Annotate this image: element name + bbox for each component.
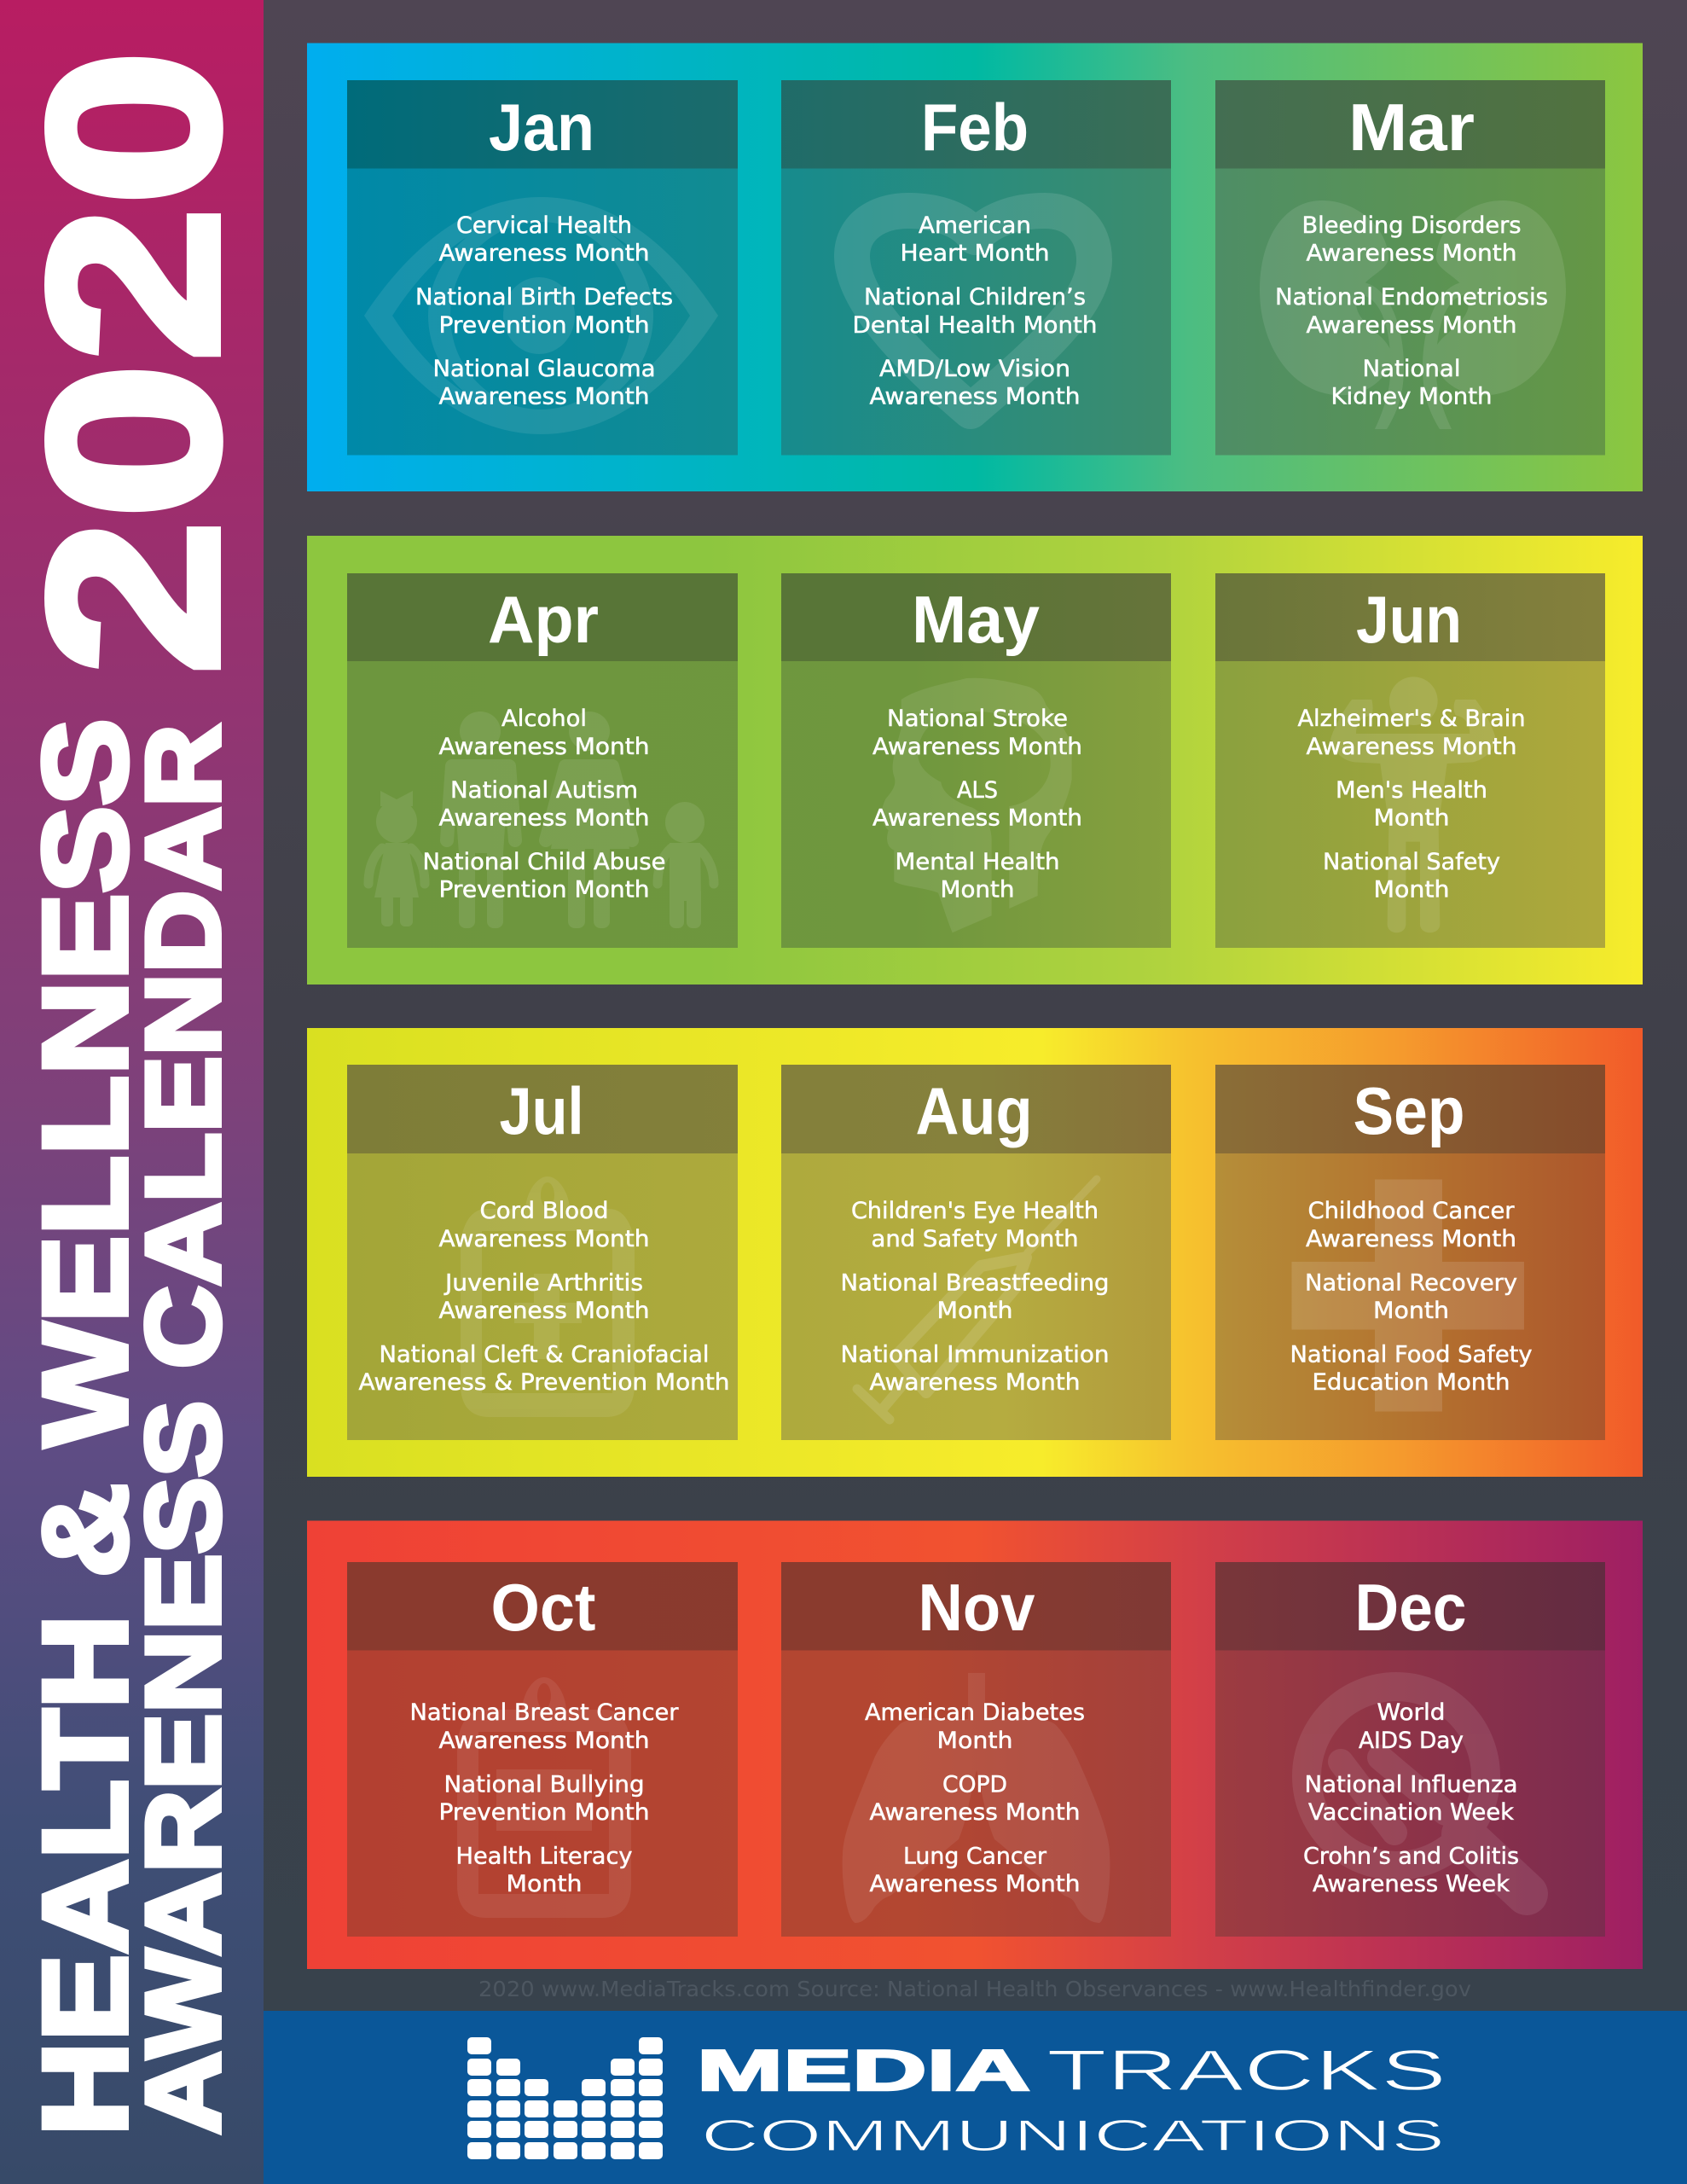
panel: June <box>1215 573 1605 948</box>
text block: March observances: Awareness Month <box>1307 241 1516 266</box>
text block: September observances: National Recovery <box>1305 1269 1517 1296</box>
text block: July observances <box>358 1198 730 1396</box>
heading: Sep: Sep <box>1353 1073 1465 1148</box>
logo wordmark: TRACKS: TRACKS <box>1046 2038 1446 2103</box>
text block: July observances: Cord Blood <box>479 1198 609 1224</box>
text block: July observances: National Cleft & Craniofacial <box>379 1342 710 1368</box>
sidebar panel <box>0 0 270 2184</box>
text block: December observances: AIDS Day <box>1359 1728 1464 1754</box>
icon: magnifying glass with bacteria <box>1307 1687 1527 1894</box>
text block: November observances: Awareness Month <box>870 1871 1080 1897</box>
text block: September observances: National Food Safety <box>1290 1342 1533 1368</box>
text block: May observances: Awareness Month <box>872 734 1082 760</box>
icon: blood bag <box>457 1677 631 1918</box>
text block: November observances <box>865 1699 1085 1897</box>
text block: December observances: World <box>1377 1699 1445 1726</box>
text block: August observances: Children's Eye Health <box>851 1198 1099 1224</box>
text block: September observances: Month <box>1373 1298 1449 1324</box>
heading: Dec: Dec <box>1354 1570 1467 1645</box>
text block: May observances: National Stroke <box>887 706 1068 732</box>
heading: Oct: Oct <box>491 1570 596 1645</box>
text block: August observances: Month <box>936 1298 1013 1324</box>
text block: May observances <box>872 706 1082 903</box>
text block: September observances: Education Month <box>1312 1369 1510 1396</box>
title: line two: AWARENESS CALENDAR <box>125 724 242 2135</box>
text block: August observances: and Safety Month <box>872 1226 1078 1252</box>
text block: June observances: National Safety <box>1323 849 1500 875</box>
text block: July observances: Awareness & Prevention Month <box>358 1369 730 1396</box>
text block: November observances: American Diabetes <box>865 1699 1085 1726</box>
text block: January observances: Awareness Month <box>438 384 650 410</box>
text block: April observances: Awareness Month <box>438 805 650 831</box>
text block: February observances: Dental Health Month <box>853 312 1097 339</box>
text block: March observances: Kidney Month <box>1330 384 1493 410</box>
text block: February observances: American <box>919 212 1031 239</box>
title: year: 2020 <box>0 49 270 676</box>
text block: October observances: Awareness Month <box>438 1728 650 1754</box>
panel: fourth quarter <box>307 1520 1643 1969</box>
text block: April observances: National Child Abuse <box>423 849 665 875</box>
panel: third quarter <box>307 1028 1643 1477</box>
text block: October observances: Prevention Month <box>438 1799 650 1826</box>
text block: September observances: Awareness Month <box>1306 1226 1516 1252</box>
text block: March observances: Bleeding Disorders <box>1301 212 1522 239</box>
text block: August observances <box>841 1198 1109 1396</box>
panel: August <box>781 1065 1171 1440</box>
heading: Jan: Jan <box>489 90 594 165</box>
heading: Jul: Jul <box>500 1073 583 1148</box>
heading: May: May <box>912 582 1040 657</box>
icon: eye <box>364 197 718 434</box>
text block: March observances: National <box>1363 356 1460 382</box>
text block: February observances: Awareness Month <box>870 384 1080 410</box>
text block: June observances: Month <box>1373 877 1450 903</box>
panel: October <box>347 1562 738 1937</box>
text block: July observances: Awareness Month <box>438 1226 650 1252</box>
icon: lungs <box>843 1673 1110 1923</box>
text block: November observances: COPD <box>942 1772 1007 1798</box>
panel: February <box>781 80 1171 456</box>
text block: February observances: AMD/Low Vision <box>879 356 1070 382</box>
text block: October observances <box>409 1699 679 1897</box>
text block: June observances: Men's Health <box>1336 777 1487 804</box>
text block: July observances: Juvenile Arthritis <box>443 1269 643 1296</box>
text block: March observances: National Endometriosis <box>1275 284 1548 311</box>
text block: October observances: National Breast Cancer <box>409 1699 679 1726</box>
icon: syringe <box>857 1179 1097 1420</box>
panel: first quarter <box>307 43 1643 491</box>
text block: January observances: Cervical Health <box>456 212 632 239</box>
text block: April observances: Prevention Month <box>438 877 650 903</box>
text block: May observances: Awareness Month <box>872 805 1082 831</box>
text block: March observances <box>1275 212 1548 410</box>
text block: August observances: National Breastfeeding <box>841 1269 1109 1296</box>
icon: heart <box>852 211 1094 411</box>
text block: October observances: National Bullying <box>443 1772 645 1798</box>
icon: family <box>368 712 714 928</box>
text block: August observances: National Immunization <box>841 1342 1109 1368</box>
text block: December observances: Crohn’s and Colitis <box>1303 1843 1519 1870</box>
panel: December <box>1215 1562 1605 1937</box>
text block: January observances <box>415 212 673 410</box>
text block: October observances: Health Literacy <box>455 1843 633 1870</box>
heading: Nov: Nov <box>918 1570 1035 1645</box>
text block: September observances <box>1290 1198 1533 1396</box>
icon: medical cross <box>1291 1179 1524 1411</box>
text block: April observances: National Autism <box>450 777 638 804</box>
text block: October observances: Month <box>507 1871 582 1897</box>
text block: December observances: Vaccination Week <box>1308 1799 1514 1826</box>
heading: Aug: Aug <box>916 1073 1032 1148</box>
icon: kidneys <box>1260 200 1566 429</box>
logo wordmark: COMMUNICATIONS: COMMUNICATIONS <box>701 2111 1445 2161</box>
icon: cord blood bag <box>461 1176 635 1417</box>
text block: May observances: ALS <box>957 777 998 804</box>
panel: May <box>781 573 1171 948</box>
panel: March <box>1215 80 1605 456</box>
panel: July <box>347 1065 738 1440</box>
panel: November <box>781 1562 1171 1937</box>
text block: January observances: Prevention Month <box>438 312 650 339</box>
text block: June observances <box>1298 706 1525 903</box>
icon: flexing man <box>1330 677 1496 932</box>
heading: Jun: Jun <box>1356 582 1462 657</box>
icon: head with brain <box>882 678 1072 932</box>
text block: July observances: Awareness Month <box>438 1298 650 1324</box>
text block: January observances: Awareness Month <box>438 241 650 266</box>
panel: September <box>1215 1065 1605 1440</box>
text block: April observances <box>423 706 665 903</box>
panel: January <box>347 80 738 456</box>
footer band <box>264 2011 1687 2184</box>
icon: logo equalizer <box>467 2037 663 2159</box>
text block: May observances: Mental Health <box>896 849 1059 875</box>
text block: June observances: Awareness Month <box>1307 734 1516 760</box>
text block: December observances: Awareness Week <box>1313 1871 1510 1897</box>
text block: November observances: Awareness Month <box>870 1799 1080 1826</box>
text block: April observances: Alcohol <box>501 706 587 732</box>
text block: June observances: Alzheimer's & Brain <box>1298 706 1525 732</box>
heading: Feb: Feb <box>921 90 1029 165</box>
text block: April observances: Awareness Month <box>438 734 650 760</box>
text block: November observances: Lung Cancer <box>903 1843 1047 1870</box>
title: line one: HEALTH & WELLNESS <box>18 718 152 2136</box>
text block: February observances: National Children’s <box>864 284 1086 311</box>
text block: December observances <box>1303 1699 1519 1897</box>
text block: January observances: National Glaucoma <box>433 356 655 382</box>
text block: December observances: National Influenza <box>1305 1772 1518 1798</box>
text block: February observances <box>853 212 1097 410</box>
text block: November observances: Month <box>936 1728 1013 1754</box>
logo wordmark: MEDIA: MEDIA <box>697 2038 1030 2103</box>
heading: Mar: Mar <box>1348 90 1475 165</box>
text block: September observances: Childhood Cancer <box>1308 1198 1515 1224</box>
panel: April <box>347 573 738 948</box>
text block: May observances: Month <box>940 877 1015 903</box>
text block: January observances: National Birth Defects <box>415 284 673 311</box>
source line: 2020 www.MediaTracks.com Source: National Health Observances - www.Healthfinder.gov <box>478 1977 1471 2001</box>
text block: February observances: Heart Month <box>901 241 1049 266</box>
text block: March observances: Awareness Month <box>1307 312 1516 339</box>
heading: Apr: Apr <box>488 582 599 657</box>
panel: second quarter <box>307 536 1643 985</box>
text block: June observances: Month <box>1373 805 1450 831</box>
text block: August observances: Awareness Month <box>870 1369 1080 1396</box>
